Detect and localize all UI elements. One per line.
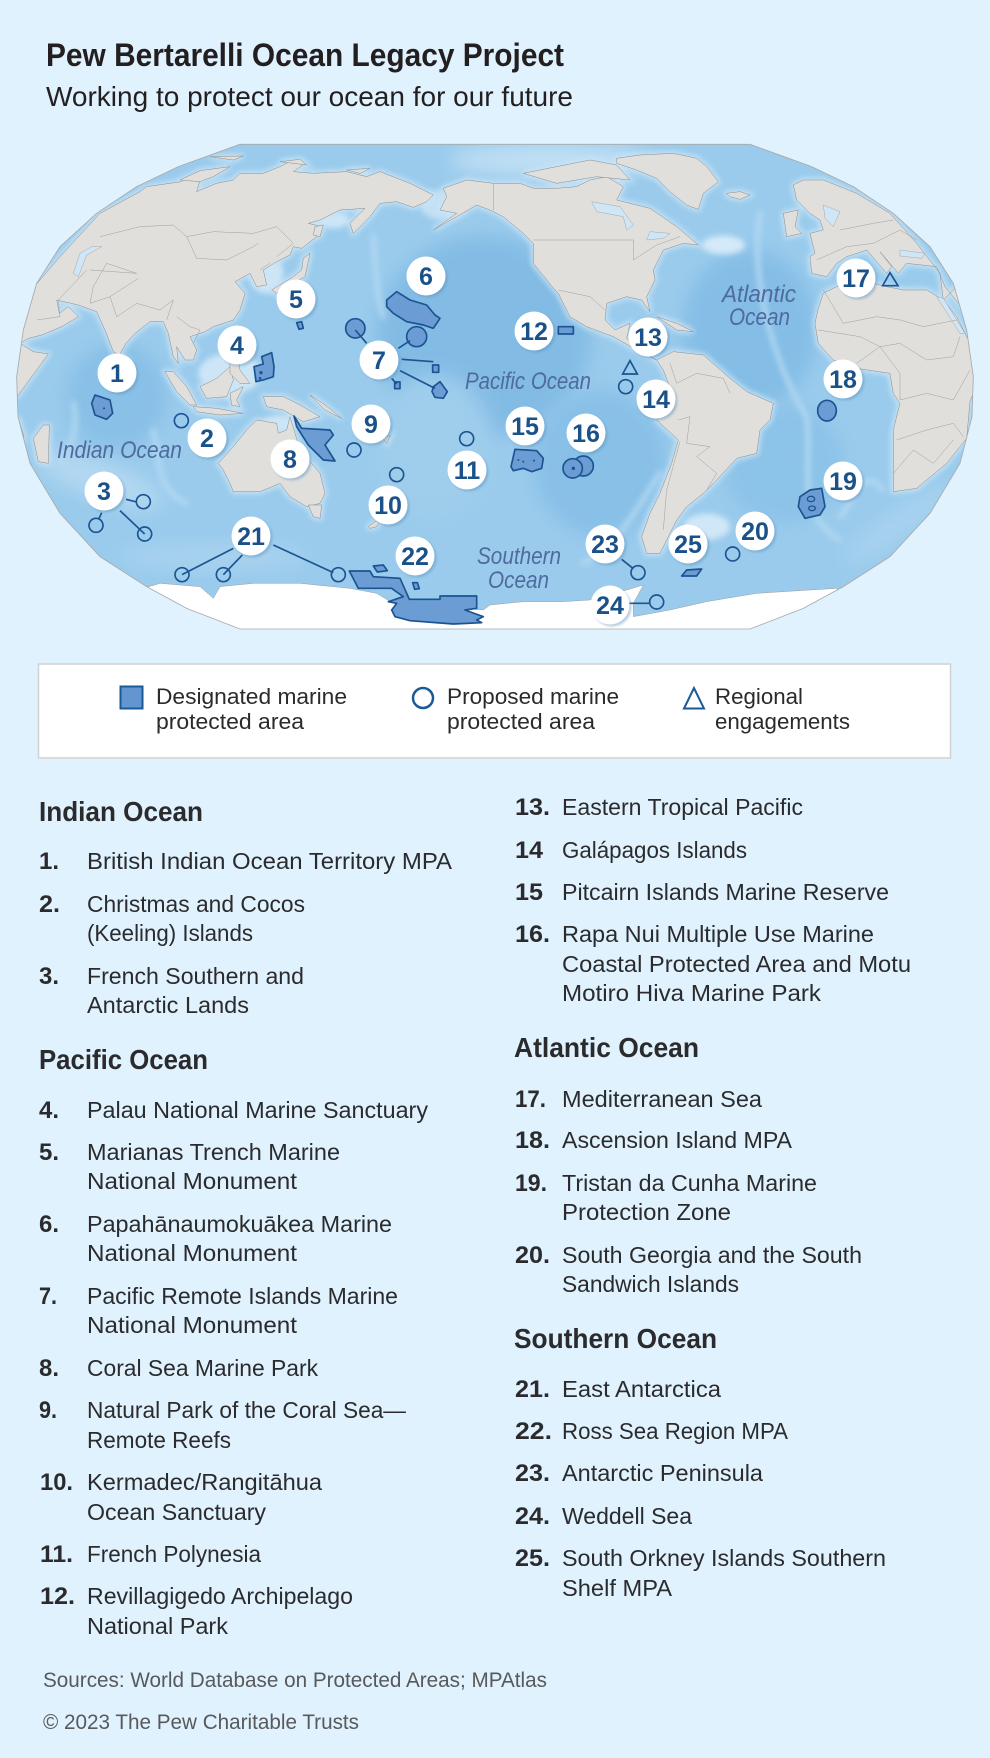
item 18: Ascension Island MPA	[562, 1127, 792, 1153]
item 1: 1.	[39, 848, 59, 875]
item 5: Marianas Trench Marine	[87, 1139, 340, 1165]
marker 25	[668, 524, 710, 566]
label: Southern Ocean: Southern	[477, 543, 561, 570]
item 4: 4.	[39, 1097, 59, 1124]
item 7: National Monument	[87, 1312, 297, 1338]
legend: designated: Designated marine	[156, 684, 347, 709]
marker 17: 17	[842, 265, 870, 293]
marker 19: 19	[829, 468, 857, 496]
numbered map markers	[84, 256, 878, 626]
list: right column	[514, 794, 911, 1601]
item 17: 17.	[515, 1086, 546, 1113]
ocean labels	[57, 281, 796, 594]
item 16	[515, 921, 911, 1006]
legend: proposed: protected area	[447, 709, 595, 734]
label: Atlantic Ocean: Ocean	[729, 304, 790, 331]
legend: proposed: Proposed marine	[447, 684, 619, 709]
item 19	[515, 1170, 817, 1225]
marker 24	[590, 586, 632, 626]
marker 11	[448, 450, 488, 492]
ocean ridges	[60, 213, 883, 563]
item 24: 24.	[515, 1503, 550, 1530]
marker 8	[270, 440, 312, 480]
item 23: 23.	[515, 1460, 550, 1487]
leader lines	[99, 330, 649, 603]
item 10	[40, 1469, 323, 1525]
item 25: 25.	[515, 1545, 550, 1572]
heading: Southern Ocean: Southern Ocean	[514, 1323, 717, 1354]
marker 7	[360, 340, 400, 382]
area: South Orkney	[682, 569, 702, 576]
marker 14: 14	[642, 386, 670, 414]
item 17: Mediterranean Sea	[562, 1086, 763, 1112]
Antarctica	[100, 583, 867, 650]
item 2: Christmas and Cocos	[87, 891, 305, 917]
area: Coral Sea	[294, 416, 335, 461]
marker 17	[836, 258, 878, 300]
marker 23: 23	[591, 531, 619, 559]
item 16: Motiro Hiva Marine Park	[562, 980, 821, 1006]
item 2: (Keeling) Islands	[87, 920, 253, 946]
item 19: Tristan da Cunha Marine	[562, 1170, 817, 1196]
item 7	[39, 1283, 398, 1338]
marker 22	[396, 536, 436, 578]
item 9: Remote Reefs	[87, 1427, 231, 1453]
marker 3	[84, 472, 126, 512]
legend: regional	[684, 684, 850, 734]
subtitle: Working to protect our ocean for our future	[46, 81, 573, 112]
marker 20: 20	[741, 518, 769, 546]
label: Pacific Ocean: Pacific Ocean	[465, 368, 591, 395]
item 14: Galápagos Islands	[562, 837, 747, 863]
item 8: Coral Sea Marine Park	[87, 1355, 318, 1381]
item 6: Papahānaumokuākea Marine	[87, 1211, 392, 1237]
marker 20	[736, 512, 776, 552]
marker 6	[406, 256, 448, 298]
item 9: Natural Park of the Coral Sea—	[87, 1397, 406, 1423]
item 16: 16.	[515, 921, 550, 948]
marker 23	[586, 524, 626, 566]
item 15: 15	[515, 879, 543, 906]
marker 13	[628, 318, 670, 358]
item 2	[39, 891, 305, 946]
marker 13: 13	[634, 324, 662, 352]
marker 21	[232, 516, 272, 558]
item 16: Coastal Protected Area and Motu	[562, 951, 911, 977]
area: Ross Sea	[349, 565, 483, 624]
proposed marine protected areas	[89, 380, 740, 609]
marker 3: 3	[97, 478, 111, 506]
item 25: South Orkney Islands Southern	[562, 1545, 886, 1571]
marker 10	[368, 486, 410, 526]
legend: proposed	[413, 684, 619, 734]
item 5	[39, 1139, 340, 1194]
marker 22: 22	[401, 543, 429, 571]
item 18: 18.	[515, 1127, 550, 1154]
marker 5: 5	[289, 286, 303, 314]
marker 16	[566, 414, 608, 454]
item 14: 14	[515, 837, 544, 864]
marker 1: 1	[110, 360, 124, 388]
country borders	[37, 183, 970, 530]
label: Indian Ocean: Indian Ocean	[57, 437, 182, 464]
legend panel	[38, 664, 950, 758]
item 6: National Monument	[87, 1240, 297, 1266]
heading: Atlantic Ocean: Atlantic Ocean	[514, 1032, 699, 1063]
marker 11: 11	[454, 457, 480, 485]
marker 19	[824, 462, 864, 502]
map outline	[17, 144, 973, 629]
regional engagement triangles	[623, 273, 898, 374]
item 12: 12.	[40, 1583, 75, 1610]
marker 9	[352, 404, 392, 446]
marker 21: 21	[237, 523, 265, 551]
item 12: Revillagigedo Archipelago	[87, 1583, 353, 1609]
item 4: Palau National Marine Sanctuary	[87, 1097, 428, 1123]
item 22: 22.	[515, 1418, 552, 1445]
item 7: Pacific Remote Islands Marine	[87, 1283, 398, 1309]
marker 12	[514, 312, 556, 352]
marker 14	[636, 380, 678, 420]
area: Pacific Remote Islands	[346, 319, 447, 398]
marker 12: 12	[520, 318, 548, 346]
marker 2	[188, 418, 228, 460]
marker 9: 9	[364, 411, 378, 439]
item 3: French Southern and	[87, 963, 304, 989]
designated marine protected areas	[92, 292, 836, 624]
inland seas and lakes	[73, 202, 965, 333]
marker 10: 10	[374, 492, 402, 520]
item 19: Protection Zone	[562, 1199, 731, 1225]
marker 4: 4	[230, 332, 244, 360]
item 9: 9.	[39, 1397, 57, 1424]
world map	[0, 130, 990, 650]
item 19: 19.	[515, 1170, 547, 1197]
marker 24: 24	[596, 592, 624, 620]
area: Pitcairn	[511, 449, 543, 472]
area: British Indian Ocean Territory	[92, 395, 113, 419]
label: Southern Ocean	[477, 543, 561, 594]
marker 7: 7	[372, 347, 386, 375]
marker 1	[98, 354, 138, 394]
item 24: Weddell Sea	[562, 1503, 693, 1529]
item 5: 5.	[39, 1139, 59, 1166]
marker 16: 16	[572, 420, 600, 448]
marker 25: 25	[674, 531, 702, 559]
label: Atlantic Ocean	[720, 281, 796, 331]
list: left column	[39, 796, 452, 1639]
area: Palau	[254, 353, 274, 382]
marker 18	[824, 360, 864, 400]
item 9	[39, 1397, 406, 1453]
map base and geography	[0, 130, 990, 650]
heading: Indian Ocean: Indian Ocean	[39, 796, 203, 827]
area: Ascension	[818, 400, 836, 421]
item 15: Pitcairn Islands Marine Reserve	[562, 879, 889, 905]
item 13: Eastern Tropical Pacific	[562, 794, 803, 820]
area: Rapa Nui and Motu Motiro Hiva	[563, 456, 593, 478]
marker 6: 6	[419, 263, 433, 291]
marker 18: 18	[829, 366, 857, 394]
item 10: Kermadec/Rangitāhua	[87, 1469, 323, 1495]
legend: designated	[120, 684, 347, 734]
area: Revillagigedo	[558, 327, 573, 334]
marker 15	[506, 406, 546, 448]
item 20: 20.	[515, 1242, 550, 1269]
title: Pew Bertarelli Ocean Legacy Project	[46, 37, 564, 73]
item 12: National Park	[87, 1613, 228, 1639]
marker 15: 15	[511, 413, 539, 441]
item 21: East Antarctica	[562, 1376, 722, 1402]
item 25: Shelf MPA	[562, 1575, 672, 1601]
area: Papahanaumokuakea	[387, 292, 440, 328]
ocean	[18, 144, 972, 616]
item 10: Ocean Sanctuary	[87, 1499, 266, 1525]
item 3: 3.	[39, 963, 59, 990]
coastal shallows	[0, 153, 980, 553]
ocean depth shading	[31, 143, 962, 572]
legend: designated: protected area	[156, 709, 304, 734]
marker 2: 2	[200, 425, 214, 453]
item 5: National Monument	[87, 1168, 297, 1194]
item 22: Ross Sea Region MPA	[562, 1418, 788, 1444]
item 6: 6.	[39, 1211, 59, 1238]
item 21: 21.	[515, 1376, 550, 1403]
legend: regional: engagements	[715, 709, 850, 734]
heading: Pacific Ocean: Pacific Ocean	[39, 1044, 208, 1075]
marker 5	[276, 280, 318, 320]
label: Atlantic Ocean: Atlantic	[720, 281, 796, 308]
item 10: 10.	[40, 1469, 73, 1496]
copyright: © 2023 The Pew Charitable Trusts	[43, 1711, 359, 1734]
item 20: South Georgia and the South	[562, 1242, 862, 1268]
area: Marianas Trench	[297, 322, 303, 329]
item 1: British Indian Ocean Territory MPA	[87, 848, 452, 874]
item 20: Sandwich Islands	[562, 1271, 739, 1297]
item 13: 13.	[515, 794, 550, 821]
item 8: 8.	[39, 1355, 59, 1382]
area: Tristan da Cunha	[798, 488, 825, 518]
sources note: Sources: World Database on Protected Areas; MPAtlas	[43, 1669, 547, 1692]
item 3	[39, 963, 304, 1018]
item 16: Rapa Nui Multiple Use Marine	[562, 921, 874, 947]
item 11: 11.	[40, 1541, 73, 1568]
item 3: Antarctic Lands	[87, 992, 249, 1018]
item 20	[515, 1242, 862, 1297]
item 23: Antarctic Peninsula	[562, 1460, 764, 1486]
item 7: 7.	[39, 1283, 57, 1310]
item 12	[40, 1583, 353, 1639]
item 25	[515, 1545, 886, 1601]
marker 4	[218, 326, 258, 366]
marker 8: 8	[283, 446, 297, 474]
legend: regional: Regional	[715, 684, 803, 709]
item 6	[39, 1211, 392, 1266]
item 11: French Polynesia	[87, 1541, 262, 1567]
land masses	[0, 153, 980, 553]
item 2: 2.	[39, 891, 60, 918]
label: Southern Ocean: Ocean	[488, 567, 549, 594]
